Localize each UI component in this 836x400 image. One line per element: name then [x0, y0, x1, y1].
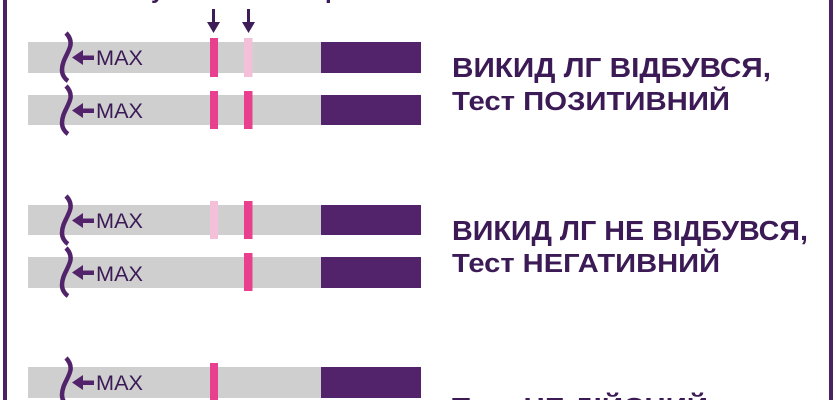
strip 1 — [28, 33, 421, 81]
result: positive: Тест ПОЗИТИВНИЙ — [452, 86, 730, 116]
result: positive — [452, 52, 771, 116]
strip 4: MAX — [96, 262, 143, 286]
strip 5 — [28, 358, 421, 400]
arrow: pointer to test line — [207, 9, 220, 33]
strip 3: MAX — [96, 209, 143, 233]
strip 1: MAX — [96, 46, 143, 70]
clipped top heading — [151, 0, 340, 4]
strip 2 — [28, 86, 421, 134]
strip 2: MAX — [96, 99, 143, 123]
result: negative — [452, 215, 808, 278]
result: negative: Тест НЕГАТИВНИЙ — [452, 248, 720, 278]
result: positive: ВИКИД ЛГ ВІДБУВСЯ, — [452, 52, 771, 83]
strip 3 — [28, 196, 421, 244]
strip 4 — [28, 248, 421, 296]
result: negative: ВИКИД ЛГ НЕ ВІДБУВСЯ, — [452, 215, 808, 246]
arrow: pointer to control line — [242, 9, 255, 33]
strip 5: MAX — [96, 371, 143, 395]
